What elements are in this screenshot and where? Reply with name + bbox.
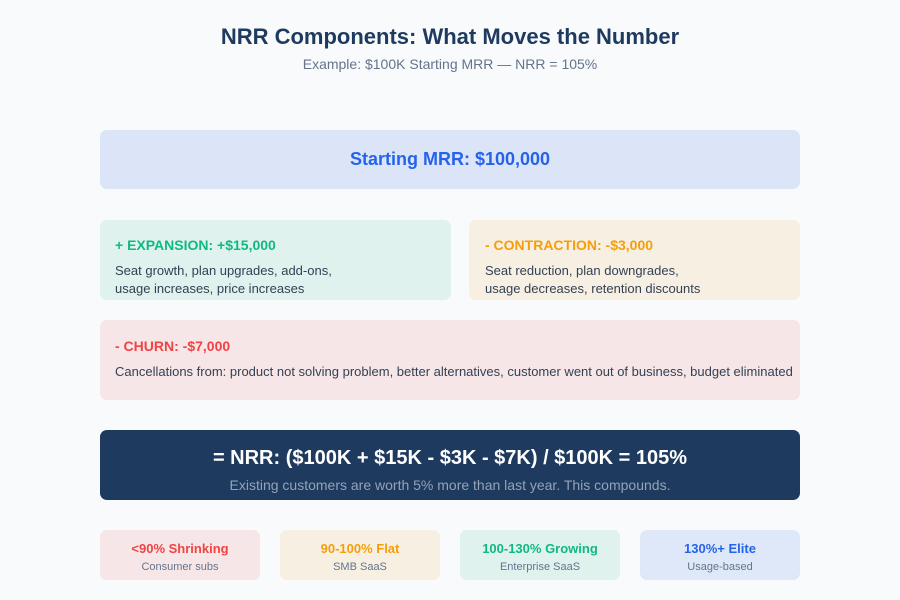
benchmark: elite: 130%+ Elite — [684, 541, 756, 556]
benchmark: flat: 90-100% Flat — [321, 541, 399, 556]
churn heading: - CHURN: -$7,000 — [115, 338, 230, 354]
benchmark: growing — [460, 530, 620, 580]
panel: contraction — [469, 220, 800, 300]
expansion text — [115, 263, 332, 296]
benchmark: shrinking: Consumer subs — [141, 561, 219, 573]
expansion text: usage increases, price increases — [115, 281, 304, 296]
formula note: Existing customers are worth 5% more than last year. This compounds. — [230, 477, 670, 493]
contraction heading: - CONTRACTION: -$3,000 — [485, 237, 653, 253]
benchmark: growing: Enterprise SaaS — [500, 561, 580, 573]
benchmark: elite: Usage-based — [687, 561, 753, 573]
benchmark: flat: SMB SaaS — [333, 561, 387, 573]
expansion text: Seat growth, plan upgrades, add-ons, — [115, 263, 332, 278]
contraction text: Seat reduction, plan downgrades, — [485, 263, 679, 278]
benchmark: elite — [640, 530, 800, 580]
formula: = NRR: ($100K + $15K - $3K - $7K) / $100K = 105% — [213, 447, 687, 469]
panel: churn — [100, 320, 800, 400]
subtitle: Example: $100K Starting MRR — NRR = 105% — [303, 56, 597, 72]
panel: NRR formula — [100, 430, 800, 500]
churn text: Cancellations from: product not solving problem, better alternatives, customer went out of business, budget eliminated — [115, 364, 793, 379]
benchmark: shrinking — [100, 530, 260, 580]
panel: starting MRR: Starting MRR: $100,000 — [350, 149, 550, 169]
benchmark: flat — [280, 530, 440, 580]
benchmark: growing: 100-130% Growing — [482, 541, 598, 556]
title: NRR Components: What Moves the Number — [221, 24, 679, 49]
panel: expansion — [100, 220, 451, 300]
benchmark: shrinking: <90% Shrinking — [131, 541, 229, 556]
contraction text — [485, 263, 700, 296]
expansion heading: + EXPANSION: +$15,000 — [115, 237, 276, 253]
contraction text: usage decreases, retention discounts — [485, 281, 700, 296]
panel: starting MRR — [100, 130, 800, 189]
